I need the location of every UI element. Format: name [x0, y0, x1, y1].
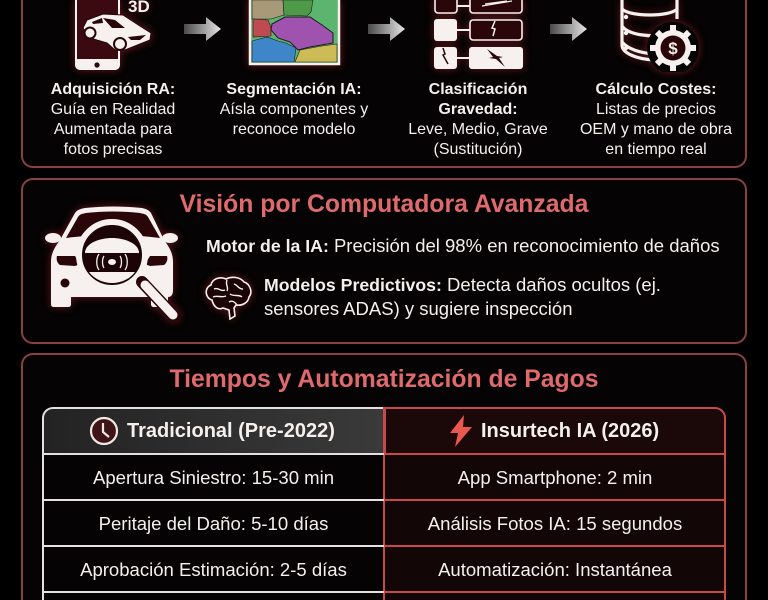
- icon: car under magnifier: [42, 202, 184, 326]
- step 3 text: (Sustitución): [434, 141, 522, 158]
- heading: computer vision: Visión por Computadora Avanzada: [180, 191, 588, 218]
- text: AI engine: Motor de la IA: Precisión del 98% en reconocimiento de daños: [206, 235, 720, 256]
- step 4 text: OEM y mano de obra: [580, 121, 732, 138]
- header text: insurtech: Insurtech IA (2026): [481, 420, 659, 442]
- comparison table: [42, 407, 726, 600]
- step 1 text: Aumentada para: [54, 121, 172, 138]
- step 4 text: [580, 81, 732, 158]
- step 4 text: Cálculo Costes:: [596, 81, 716, 98]
- column header: insurtech: [384, 407, 726, 453]
- text: predictive models: Modelos Predictivos: Detecta daños ocultos (ej.: [264, 274, 661, 295]
- step 3 text: Gravedad:: [438, 101, 518, 118]
- panel: times and payment automation: [21, 353, 747, 600]
- step 2 text: Aísla componentes y: [220, 101, 368, 118]
- arrow 1: [184, 17, 221, 41]
- icon: clock: [90, 416, 118, 446]
- step 1 text: [51, 81, 175, 158]
- step 3 text: Leve, Medio, Grave: [408, 121, 548, 138]
- icon: phone with car: [70, 0, 156, 75]
- step 2 text: reconoce modelo: [233, 121, 355, 138]
- icon: price database with gear: [616, 0, 704, 77]
- column header: traditional: [42, 407, 384, 453]
- step 3 text: Clasificación: [429, 81, 527, 98]
- step 1 text: fotos precisas: [64, 141, 162, 158]
- icon: price database with gear: $: [668, 39, 678, 58]
- panel: computer vision: [21, 178, 747, 344]
- step 3 text: [408, 81, 548, 158]
- step 4 text: Listas de precios: [596, 101, 716, 118]
- heading: times and automation: Tiempos y Automatización de Pagos: [169, 366, 599, 393]
- arrow 2: [368, 17, 405, 41]
- step 2 text: [220, 81, 368, 138]
- row 1 insurtech: App Smartphone: 2 min: [458, 467, 652, 488]
- step 1 text: Adquisición RA:: [51, 81, 175, 98]
- step 1 text: Guía en Realidad: [51, 101, 175, 118]
- row 2 insurtech: Análisis Fotos IA: 15 segundos: [428, 513, 682, 534]
- text: predictive models: sensores ADAS) y sugiere inspección: [264, 298, 572, 319]
- arrow 3: [550, 17, 587, 41]
- icon: severity classification: [429, 0, 528, 74]
- text: predictive models: [264, 274, 661, 319]
- row 1 traditional: Apertura Siniestro: 15-30 min: [93, 467, 334, 488]
- row 2 traditional: Peritaje del Daño: 5-10 días: [99, 513, 328, 534]
- panel: process steps: [21, 0, 747, 168]
- row 3 insurtech: Automatización: Instantánea: [438, 559, 672, 580]
- step 2 text: Segmentación IA:: [226, 81, 362, 98]
- header text: traditional: Tradicional (Pre-2022): [127, 420, 335, 442]
- row 3 traditional: Aprobación Estimación: 2-5 días: [80, 559, 347, 580]
- icon: segmented car image: [244, 0, 346, 70]
- icon: brain: [201, 272, 256, 322]
- icon: lightning bolt: [450, 415, 472, 447]
- step 4 text: en tiempo real: [605, 141, 707, 158]
